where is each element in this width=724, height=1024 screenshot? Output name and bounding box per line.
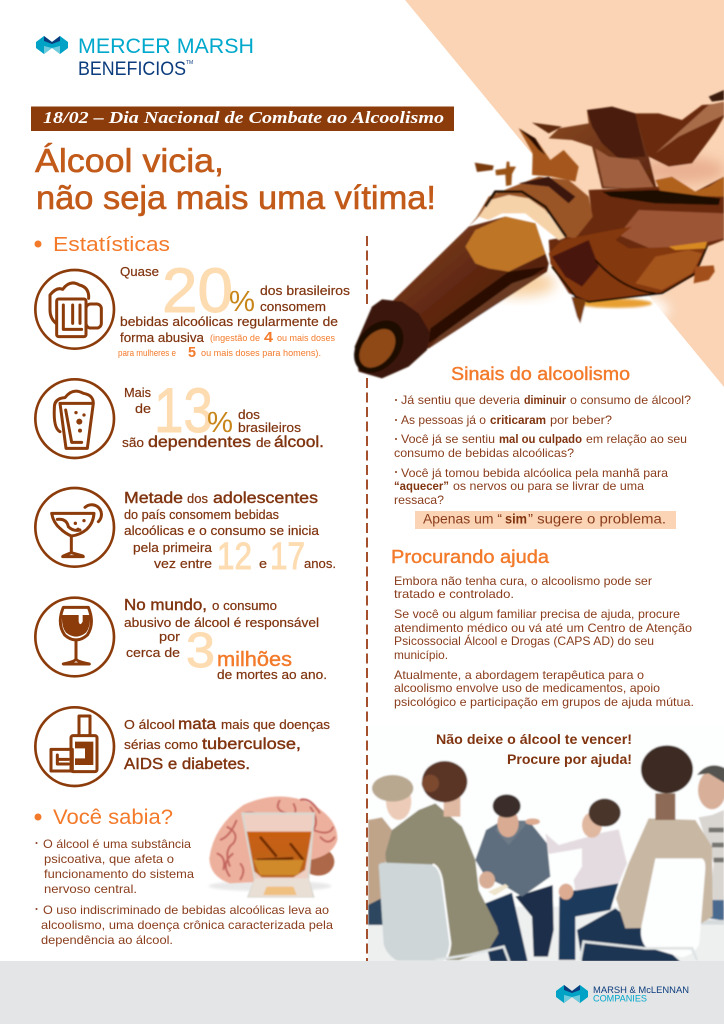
stat: 20 percent: 5 — [188, 344, 196, 361]
stat: 20 percent — [35, 256, 350, 361]
body text: município. — [394, 648, 448, 662]
question list: em relação ao seu — [586, 432, 687, 446]
callout: apenas um sim: ” sugere o problema. — [528, 510, 666, 526]
logo: Marsh & McLennan Companies — [556, 985, 689, 1004]
callout: apenas um sim — [415, 510, 676, 529]
stat: 13 percent: de — [256, 436, 271, 450]
text: first fact: O álcool é uma substância — [43, 837, 191, 851]
question list: o consumo de álcool? — [570, 393, 691, 407]
stat: 3 million deaths: de mortes ao ano. — [217, 668, 327, 682]
stat: adolescents: dos — [187, 492, 208, 506]
stat: 3 million deaths: o consumo — [212, 599, 277, 613]
stat: adolescents: e — [259, 557, 267, 571]
callout: apenas um sim: Apenas um “ — [423, 510, 502, 526]
woman with bun — [484, 892, 528, 961]
logo: Marsh & McLennan Companies: MARSH & McLENNAN — [593, 985, 689, 996]
stat: 20 percent: ou mais doses — [277, 333, 335, 344]
question list — [394, 393, 691, 507]
heading: Você sabia? — [53, 806, 173, 829]
peach diagonal background — [405, 0, 724, 387]
text: second fact: alcoolismo, uma doença crônica caracterizada pela — [41, 918, 333, 932]
stat: 20 percent: 20 — [162, 256, 233, 326]
stat: adolescents: 12 — [217, 536, 252, 578]
stat: 13 percent — [35, 376, 324, 458]
text: first fact: funcionamento do sistema — [44, 867, 194, 881]
stat: 20 percent: forma abusiva — [120, 330, 205, 345]
stat: alcohol kills: mata — [178, 716, 216, 733]
stat: adolescents: adolescentes — [213, 490, 318, 507]
stat: alcohol kills: sérias como — [124, 738, 198, 752]
left blonde woman — [368, 817, 392, 905]
question list: “aquecer” — [394, 479, 449, 493]
stat: adolescents: pela primeira — [133, 541, 212, 555]
icon: beer glass — [35, 379, 114, 458]
stat: 20 percent: para mulheres e — [118, 348, 176, 359]
stat: 13 percent: 13 — [154, 376, 213, 446]
stat: 13 percent: dos — [238, 408, 260, 422]
beige sweater woman — [577, 908, 680, 962]
title: Álcool vicia, — [35, 142, 224, 179]
stat: 20 percent: % — [229, 286, 255, 318]
call to action — [436, 732, 632, 767]
call to action: Não deixe o álcool te vencer! — [436, 732, 632, 747]
body text: tratado e controlado. — [394, 587, 514, 601]
stat: adolescents: do país consomem bebidas — [124, 508, 279, 522]
stat: adolescents: vez entre — [154, 557, 212, 571]
text: first fact — [36, 837, 194, 896]
heading: Sinais do alcoolismo — [451, 364, 630, 384]
stat: alcohol kills: O álcool — [124, 718, 175, 732]
body text — [394, 574, 694, 709]
stat: alcohol kills: AIDS e diabetes. — [124, 756, 250, 773]
stat: 20 percent: 4 — [264, 329, 274, 346]
broken bottle image — [344, 90, 724, 382]
body text: Psicossocial Álcool e Drogas (CAPS AD) do seu — [394, 633, 654, 648]
question list: Já sentiu que deveria — [401, 393, 520, 407]
logo: Marsh & McLennan Companies: COMPANIES — [593, 994, 647, 1004]
stat: 20 percent: dos brasileiros — [260, 284, 350, 298]
stat: adolescents: anos. — [304, 557, 336, 571]
stat: 3 million deaths: por — [159, 630, 180, 644]
white chair left — [379, 863, 450, 961]
logo: Mercer Marsh Beneficios: BENEFICIOS — [78, 59, 186, 80]
stat: 20 percent: (ingestão de — [210, 333, 260, 344]
icon: cocktail — [35, 488, 114, 567]
question list: criticaram — [490, 413, 546, 427]
right seated woman — [559, 883, 619, 960]
stat: 13 percent: álcool. — [274, 434, 324, 451]
stat: 13 percent: % — [207, 407, 233, 439]
stat: alcohol kills: tuberculose, — [202, 736, 301, 753]
stat: adolescents: alcoólicas e o consumo se inicia — [124, 524, 319, 538]
question list: Você já se sentiu — [401, 432, 495, 446]
stat: alcohol kills — [35, 707, 330, 786]
stat: 3 million deaths — [35, 597, 327, 682]
stat: 3 million deaths: cerca de — [126, 646, 180, 660]
stat: 13 percent: dependentes — [148, 434, 251, 451]
body text: alcoolismo envolve uso de medicamentos, apoio — [394, 681, 660, 695]
dark base of lower shards — [549, 177, 724, 303]
logo: Mercer Marsh Beneficios: MERCER MARSH — [78, 35, 254, 58]
question list: os nervos ou para se livrar de uma — [453, 479, 644, 493]
stat: 3 million deaths: milhões — [217, 649, 292, 671]
date banner — [31, 106, 454, 131]
logo: Mercer Marsh Beneficios — [36, 35, 254, 80]
stat: 3 million deaths: No mundo, — [124, 597, 207, 614]
section heading: Estatísticas: Estatísticas — [53, 234, 170, 256]
question list: diminuir — [524, 393, 566, 407]
section: Você sabia? — [34, 797, 337, 947]
stat: alcohol kills: mais que doenças — [221, 718, 330, 732]
icon: bottle and glass — [35, 707, 114, 786]
call to action: Procure por ajuda! — [507, 752, 632, 767]
body text: atendimento médico ou vá até um Centro de Atenção — [394, 621, 692, 635]
heading: Procurando ajuda — [391, 547, 550, 567]
stat: 13 percent: são — [122, 436, 144, 450]
section: Procurando ajuda — [391, 547, 694, 709]
title: não seja mais uma vítima! — [36, 179, 436, 216]
question list: Você já tomou bebida alcóolica pela manhã para — [401, 466, 668, 480]
body text: Se você ou algum familiar precisa de ajuda, procure — [394, 607, 680, 621]
footer band — [0, 961, 724, 1024]
stat: adolescents — [35, 488, 336, 578]
stat: 13 percent: brasileiros — [238, 421, 301, 435]
icon: beer mug — [35, 270, 114, 349]
question list: mal ou culpado — [499, 432, 582, 446]
support group photo — [368, 744, 724, 961]
stat: 20 percent: consomem — [260, 300, 326, 314]
text: first fact: psicoativa, que afeta o — [44, 852, 174, 866]
stat: 3 million deaths: abusivo de álcool é responsável — [124, 616, 319, 630]
text: second fact: O uso indiscriminado de bebidas alcoólicas leva ao — [43, 903, 329, 917]
body text: Embora não tenha cura, o alcoolismo pode ser — [394, 574, 652, 588]
stat: 13 percent: Mais — [124, 386, 151, 400]
section: Sinais do alcoolismo — [394, 364, 691, 529]
question list: ressaca? — [394, 493, 444, 507]
stat: 20 percent: bebidas alcoólicas regularmente de — [120, 314, 338, 329]
brain with whisky glass image — [208, 797, 337, 897]
stat: adolescents: 17 — [270, 536, 305, 578]
text: second fact — [36, 903, 333, 947]
stat: adolescents: Metade — [124, 490, 183, 507]
text: second fact: dependência ao álcool. — [41, 933, 173, 947]
date banner: 18/02 – Dia Nacional de Combate ao Alcoolismo — [43, 108, 444, 127]
logo: Mercer Marsh Beneficios: TM — [186, 60, 193, 66]
text: first fact: nervoso central. — [44, 882, 137, 896]
stat: 3 million deaths: 3 — [186, 624, 215, 678]
question list: consumo de bebidas alcoólicas? — [394, 446, 574, 460]
title — [35, 142, 436, 216]
question list: As pessoas já o — [401, 413, 486, 427]
dashed column divider — [366, 236, 368, 961]
center man — [515, 885, 554, 957]
icon: wine glass — [35, 598, 114, 676]
stat: 20 percent: ou mais doses para homens). — [201, 348, 321, 359]
callout: apenas um sim: sim — [505, 510, 527, 526]
far-right man — [698, 771, 724, 809]
body text: Atualmente, a abordagem terapêutica para o — [394, 668, 644, 682]
question list: por beber? — [550, 413, 612, 427]
stat: 20 percent: Quase — [120, 265, 159, 279]
body text: psicológico e participação em grupos de ajuda mútua. — [394, 695, 694, 709]
stat: 13 percent: de — [135, 402, 151, 416]
